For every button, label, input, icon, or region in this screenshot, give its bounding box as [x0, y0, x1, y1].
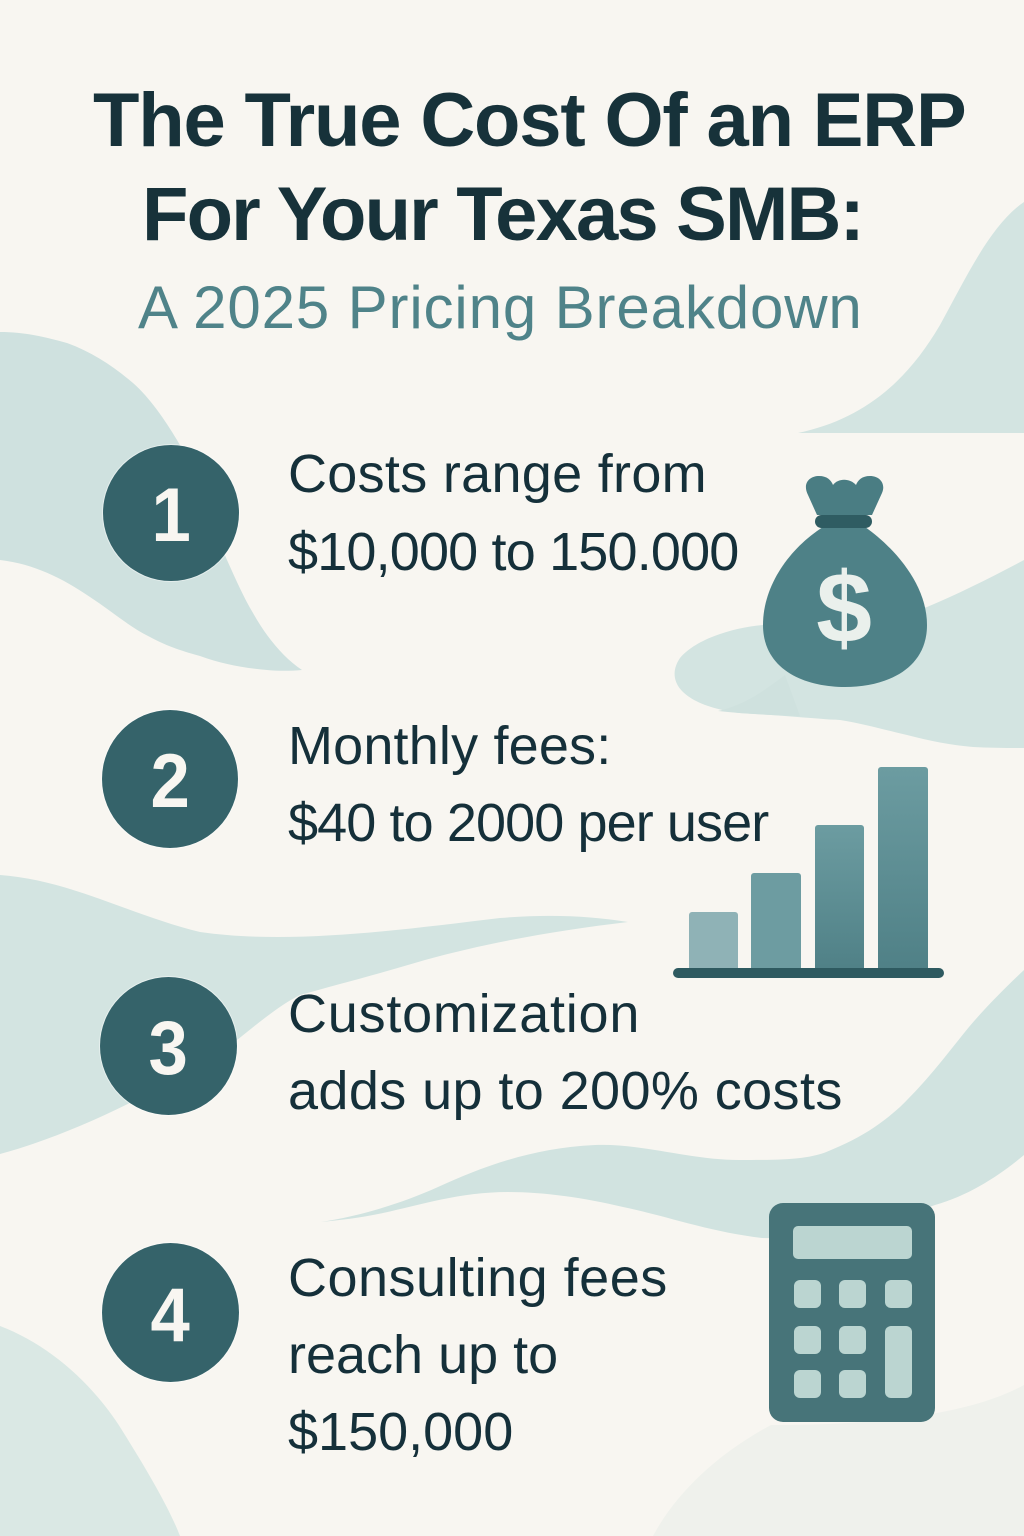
- item 2 number badge: 2: [150, 739, 190, 824]
- item 3 number badge: 3: [149, 1006, 188, 1091]
- item 2 text: [288, 716, 768, 853]
- title: [93, 78, 966, 341]
- item 4 text: reach up to: [288, 1325, 558, 1385]
- item 1 number badge: [103, 445, 239, 581]
- item 4 text: $150,000: [288, 1402, 513, 1462]
- subtitle: A 2025 Pricing Breakdown: [138, 274, 863, 341]
- item 2 text: Monthly fees:: [288, 716, 611, 776]
- icon: money bag: $: [816, 552, 872, 664]
- item 1 text: $10,000 to 150.000: [288, 522, 738, 582]
- title line 2: For Your Texas SMB:: [142, 172, 863, 257]
- item 1 text: [288, 444, 738, 582]
- item 1 text: Costs range from: [288, 444, 707, 504]
- item 4 text: Consulting fees: [288, 1248, 668, 1308]
- item 4 text: [288, 1248, 668, 1462]
- icon: calculator: [769, 1203, 935, 1422]
- item 2 number badge: [102, 710, 238, 848]
- item 4 number badge: [102, 1243, 239, 1382]
- item 4 number badge: 4: [151, 1273, 190, 1358]
- item 2 text: $40 to 2000 per user: [288, 793, 768, 853]
- item 3 text: Customization: [288, 984, 640, 1044]
- item 3 text: [288, 984, 843, 1121]
- title line 1: The True Cost Of an ERP: [93, 78, 966, 163]
- item 3 text: adds up to 200% costs: [288, 1061, 843, 1121]
- bar chart icon: [673, 767, 944, 978]
- item 1 number badge: 1: [151, 473, 191, 558]
- item 3 number badge: [100, 977, 237, 1115]
- icon: money bag: [763, 476, 927, 687]
